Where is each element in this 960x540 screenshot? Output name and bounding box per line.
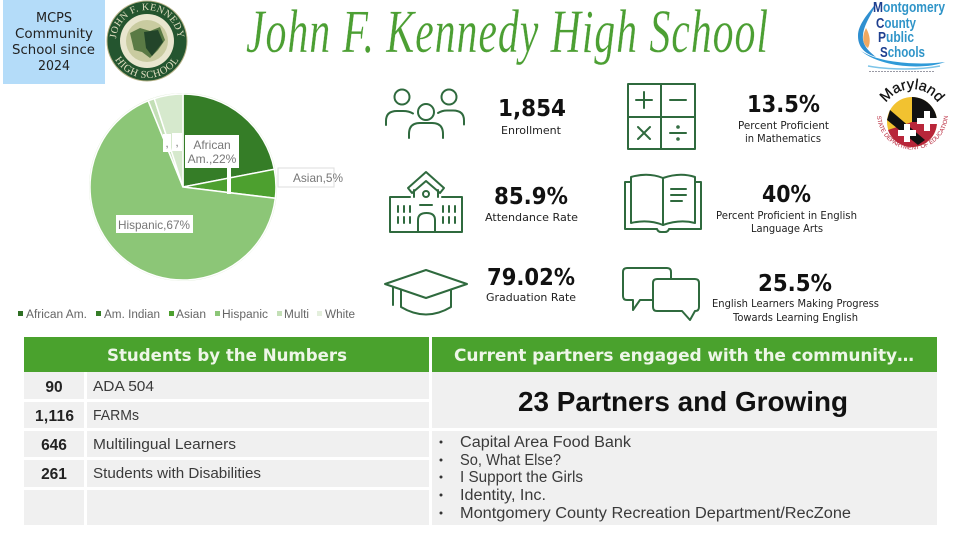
callout: 23 partners and growing: 23 Partners and Growing: [518, 386, 848, 417]
stat: enrollment: Enrollment: [501, 125, 561, 137]
icon: John F. Kennedy High School crest: HIGH SCHOOL: [115, 56, 178, 78]
icon: Montgomery County Public Schools logo: Montgomery: [873, 0, 945, 16]
row: empty: [24, 490, 429, 525]
stat: percent proficient in mathematics: in Mathematics: [745, 133, 821, 145]
stat: English learners making progress: Towards Learning English: [732, 312, 858, 324]
stat: percent proficient in English language arts: Percent Proficient in English: [716, 210, 857, 222]
data label: African Am. 22%: African: [193, 138, 231, 152]
row: FARMs: [24, 402, 429, 428]
row: students with disabilities: 261: [41, 466, 67, 483]
icon: Maryland State Department of Education seal: Maryland: [879, 78, 946, 102]
stat: percent proficient in mathematics: Percent Proficient: [738, 120, 829, 132]
icon: Montgomery County Public Schools logo: Public: [878, 30, 914, 46]
row: students with disabilities: Students with Disabilities: [93, 465, 261, 482]
icon: John F. Kennedy High School crest: JOHN F. KENNEDY: [110, 4, 184, 38]
icon: Maryland State Department of Education seal: STATE DEPARTMENT OF EDUCATION: [877, 116, 948, 150]
data label: Multi: ,: [165, 136, 169, 150]
chart legend: White: [325, 309, 355, 321]
row: multilingual learners: Multilingual Learners: [93, 436, 236, 453]
panel: students by the numbers: [24, 337, 429, 525]
icon: Montgomery County Public Schools logo: County: [876, 16, 916, 32]
callout: MCPS Community School since 2024: Community: [15, 27, 93, 42]
chart legend: Asian: [176, 309, 206, 321]
callout: MCPS Community School since 2024: MCPS: [36, 11, 72, 26]
chart legend: Multi: [284, 309, 309, 321]
data label: Multi: [163, 134, 171, 152]
title: John F. Kennedy High School: [246, 0, 768, 66]
data label: Asian 5%: [278, 168, 343, 187]
icon: chat bubbles: [623, 268, 699, 320]
chart legend: [18, 309, 355, 321]
icon: Montgomery County Public Schools logo: [858, 0, 945, 72]
list: partners: So, What Else?: [460, 452, 561, 469]
stat: enrollment: 1,854: [498, 96, 566, 122]
stat: percent proficient in English language arts: Language Arts: [751, 223, 823, 235]
heading: students by the numbers: [24, 337, 429, 372]
row: FARMs: FARMs: [93, 407, 139, 424]
row: ADA 504: 90: [45, 379, 63, 396]
callout: MCPS Community School since 2024: [3, 0, 105, 84]
icon: school building: [390, 172, 462, 232]
data label: White: [172, 133, 182, 151]
row: students with disabilities: [24, 460, 429, 487]
pie chart: student demographics: [89, 93, 343, 281]
row: multilingual learners: 646: [41, 437, 67, 454]
row: FARMs: 1,116: [35, 408, 74, 425]
row: ADA 504: [24, 372, 429, 399]
stat: percent proficient in mathematics: 13.5%: [747, 92, 820, 118]
heading: students by the numbers: Students by the Numbers: [107, 346, 347, 366]
stat: English learners making progress: 25.5%: [758, 271, 832, 297]
list: partners: I Support the Girls: [460, 469, 583, 486]
chart legend: Hispanic: [222, 309, 268, 321]
list: partners: Capital Area Food Bank: [460, 434, 631, 451]
data label: Asian 5%: Asian,5%: [293, 171, 343, 185]
list: partners: [432, 431, 937, 525]
pie slice: African Am. 22%: [183, 94, 274, 187]
list: partners: Identity, Inc.: [460, 487, 546, 504]
heading: current partners: [432, 337, 937, 372]
pie slice: Asian 5%: [183, 169, 276, 198]
pie slice: Multi: [148, 99, 183, 187]
stat: graduation rate: Graduation Rate: [486, 292, 576, 304]
stat: attendance rate: 85.9%: [494, 184, 568, 210]
chart legend: Am. Indian: [104, 309, 160, 321]
stat: percent proficient in English language arts: 40%: [762, 182, 811, 208]
data label: African Am. 22%: Am.,22%: [188, 152, 237, 166]
stat: percent proficient in English language arts: [716, 182, 857, 235]
stat: English learners making progress: English Learners Making Progress: [712, 298, 879, 310]
stat: English learners making progress: [712, 271, 879, 324]
stat: enrollment: [498, 96, 566, 137]
callout: MCPS Community School since 2024: School since: [12, 43, 95, 58]
heading: current partners: Current partners engaged with the community…: [454, 346, 914, 366]
icon: Maryland State Department of Education seal: [877, 78, 948, 150]
stat: graduation rate: [486, 265, 576, 304]
stat: percent proficient in mathematics: [738, 92, 829, 145]
icon: Montgomery County Public Schools logo: Schools: [880, 45, 925, 61]
pie slice: Hispanic 67%: [90, 101, 275, 280]
row: multilingual learners: [24, 431, 429, 457]
panel: current partners: [432, 337, 937, 525]
data label: White: ,: [175, 135, 179, 149]
pie slice: White: [154, 94, 183, 187]
icon: open book: [625, 175, 701, 232]
stat: graduation rate: 79.02%: [487, 265, 575, 291]
data label: African Am. 22%: [185, 135, 239, 194]
callout: MCPS Community School since 2024: 2024: [38, 59, 70, 74]
stat: attendance rate: Attendance Rate: [485, 212, 578, 224]
row: ADA 504: ADA 504: [93, 378, 154, 395]
icon: John F. Kennedy High School crest: [106, 0, 188, 82]
icon: people: [386, 90, 464, 138]
chart legend: African Am.: [26, 309, 87, 321]
icon: calculator math symbols: [628, 84, 695, 149]
icon: graduation cap: [385, 270, 467, 314]
callout: 23 partners and growing: [432, 372, 937, 428]
stat: attendance rate: [485, 184, 578, 224]
data label: Hispanic 67%: Hispanic,67%: [118, 218, 190, 232]
list: partners: Montgomery County Recreation Department/RecZone: [460, 505, 851, 522]
